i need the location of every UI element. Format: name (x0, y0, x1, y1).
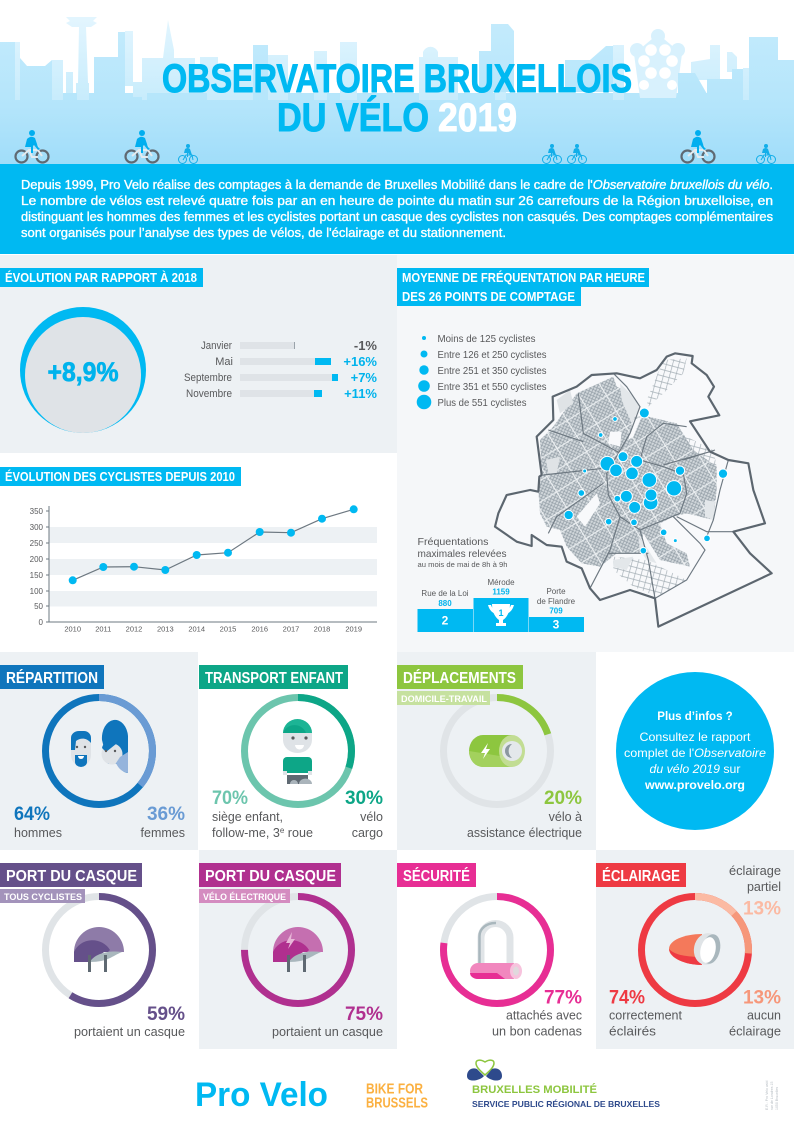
panel: port du casque tous cyclistes (0, 863, 185, 1039)
donut 64/36 (46, 698, 152, 804)
map count points (564, 408, 728, 554)
line chart: 50 (34, 602, 44, 611)
heading (397, 665, 523, 705)
stat: 64% hommes: 64% (14, 804, 50, 825)
stat: 20%: assistance électrique (467, 826, 582, 840)
logo: Bike for Brussels: BIKE FOR (366, 1080, 423, 1098)
icon: trophy: 1 (498, 608, 504, 618)
podium: fréquentations maximales (418, 536, 584, 632)
podium: fréquentations maximales: Mérode (487, 578, 515, 587)
stat: 36% femmes (141, 804, 185, 840)
heading: TRANSPORT ENFANT (205, 670, 343, 687)
stat: 77%: attachés avec (506, 1008, 582, 1022)
line chart: 2019 (345, 624, 362, 634)
stat: 77%: un bon cadenas (492, 1024, 582, 1038)
donut 20% (444, 698, 550, 804)
stat: 70% siège enfant: e (280, 826, 285, 835)
stat: 20%: 20% (544, 788, 582, 809)
stat: 59%: portaient un casque (74, 1025, 185, 1039)
callout: plus d'infos: du vélo 2019 sur (650, 762, 740, 776)
stat: 30% vélo cargo: vélo (360, 810, 383, 824)
icon: trophy (488, 604, 514, 626)
month bars: Novembre (186, 388, 232, 400)
stat: 77% (492, 988, 582, 1038)
icon: cyclist 3 (682, 130, 714, 162)
stat: 13% aucun éclairage (729, 988, 781, 1038)
stat: 74% correctement éclairés: éclairés (609, 1024, 656, 1038)
month bars: Septembre (184, 372, 232, 384)
map legend: Moins de 125 cyclistes (438, 333, 536, 345)
podium: fréquentations maximales: 3 (553, 618, 560, 632)
icon: atomium (630, 29, 685, 98)
month bars: Janvier (201, 340, 232, 352)
stat: éclairage partiel 13%: 13% (743, 898, 781, 920)
callout: plus d'infos (616, 672, 774, 830)
heading (199, 863, 341, 903)
stat: 30% vélo cargo (345, 788, 383, 840)
line chart: 350 (30, 507, 44, 516)
panel: introduction: distinguant les hommes des femmes et les cyclistes portant un casque des cyclistes non casqués. Des comptages complémentaires (21, 210, 773, 224)
line chart: 2012 (126, 624, 142, 634)
line chart: 2015 (220, 624, 236, 634)
month bars (184, 338, 377, 401)
heading: VÉLO ÉLECTRIQUE (203, 892, 286, 903)
big circle +8,9%: +8,9% (48, 357, 118, 387)
stat: 13% aucun éclairage: aucun (747, 1008, 781, 1022)
stat: 70% siège enfant: siège enfant, (212, 810, 283, 824)
heading (397, 268, 649, 306)
logo: Bruxelles Mobilité: SERVICE PUBLIC RÉGIONAL DE BRUXELLES (472, 1099, 660, 1109)
panel: évolution des cyclistes (0, 467, 377, 634)
line chart (30, 505, 377, 634)
heading: DÉPLACEMENTS (403, 668, 516, 687)
stat: 59%: 59% (147, 1004, 185, 1025)
stat: 75% (272, 1004, 383, 1039)
line chart: 200 (30, 555, 44, 564)
icon: man and woman (71, 720, 128, 773)
map legend: Entre 126 et 250 cyclistes (438, 349, 546, 361)
stat: 74% correctement éclairés: 74% (609, 988, 645, 1008)
map legend: Entre 251 et 350 cyclistes (438, 365, 546, 377)
logo: Bike for Brussels: BRUSSELS (366, 1094, 428, 1112)
line chart: 2014 (188, 624, 205, 634)
donut 74/13/13 (642, 896, 748, 1004)
month bars: +16% (343, 354, 377, 369)
podium: fréquentations maximales: 709 (549, 606, 563, 616)
legal notice: 1050 Bruxelles (775, 1087, 779, 1110)
donut 75% (244, 896, 352, 1004)
callout: plus d'infos: Plus d’infos ? (657, 711, 733, 723)
heading: DOMICILE-TRAVAIL (401, 694, 487, 705)
stat: 70% siège enfant: roue (284, 826, 313, 840)
panel: éclairage (596, 850, 794, 1049)
header: city skyline (0, 17, 794, 164)
legal notice (765, 1080, 779, 1110)
stat: 70% siège enfant: follow-me, 3 (212, 826, 279, 840)
stat: 30% vélo cargo: cargo (352, 826, 383, 840)
heading: ÉCLAIRAGE (602, 866, 680, 885)
callout: plus d'infos: complet de l' Observatoire (624, 746, 766, 760)
logo: Bike for Brussels (366, 1080, 428, 1112)
legal notice: rue de Londres 15 (770, 1082, 774, 1110)
stat: 59% (74, 1004, 185, 1039)
stat: 74% correctement éclairés (609, 988, 683, 1038)
stat: 77%: 77% (544, 988, 582, 1008)
line chart: 2010 (64, 624, 81, 634)
heading: PORT DU CASQUE (6, 868, 137, 885)
logo: Pro Velo: Pro Velo (195, 1076, 328, 1114)
icon: electric helmet (273, 927, 323, 972)
podium: fréquentations maximales: maximales relevées (418, 548, 506, 560)
stat: 20%: vélo à (549, 810, 582, 824)
heading: PORT DU CASQUE (205, 868, 336, 885)
line chart: 300 (30, 523, 44, 532)
podium: fréquentations maximales: 880 (438, 599, 452, 608)
stat: 70% siège enfant (212, 788, 313, 840)
stat: 13% aucun éclairage: 13% (743, 988, 781, 1008)
icon: small cyclist 2 (542, 144, 562, 164)
donut 59% (46, 896, 152, 1004)
heading (596, 863, 686, 887)
heading: SÉCURITÉ (403, 866, 470, 885)
title (162, 57, 632, 140)
title: 2019 (438, 96, 517, 140)
panel: introduction (0, 164, 794, 254)
heading: MOYENNE DE FRÉQUENTATION PAR HEURE (402, 270, 645, 285)
stat: 20% (467, 788, 582, 840)
stat: 36% femmes: femmes (141, 826, 185, 840)
heading (397, 863, 476, 887)
heading (0, 665, 104, 689)
stat: 75%: portaient un casque (272, 1025, 383, 1039)
legal notice: E.R.: Pro Velo asbl (765, 1080, 769, 1110)
icon: child (283, 719, 312, 784)
heading: TOUS CYCLISTES (4, 892, 82, 903)
map legend: Plus de 551 cyclistes (438, 397, 526, 409)
donut 77% (444, 896, 550, 1004)
icon: bike light (669, 931, 723, 967)
big circle +8,9% (20, 307, 146, 433)
donut 30/70 (244, 698, 352, 804)
map legend (417, 333, 546, 409)
icon: cyclist 1 (16, 130, 48, 162)
panel: répartition (0, 652, 198, 850)
line chart: 250 (30, 539, 44, 548)
panel: évolution par rapport à 2018 (0, 255, 397, 453)
logo: Bruxelles Mobilité (467, 1060, 660, 1109)
heading: ÉVOLUTION DES CYCLISTES DEPUIS 2010 (5, 469, 235, 484)
podium: fréquentations maximales: Porte (546, 587, 566, 596)
line chart: 100 (30, 587, 44, 596)
panel: moyenne de fréquentation (397, 255, 794, 652)
icon: helmet (74, 927, 124, 972)
stat: 64% hommes: hommes (14, 826, 62, 840)
stat: 74% correctement éclairés: correctement (609, 1008, 683, 1022)
heading: RÉPARTITION (6, 668, 98, 687)
podium: fréquentations maximales: 1159 (492, 588, 510, 596)
heading (199, 665, 348, 689)
icon: U-lock (470, 923, 522, 979)
stat: 13% aucun éclairage: éclairage (729, 1024, 781, 1038)
icon: small cyclist 4 (756, 144, 776, 164)
icon: battery (469, 735, 525, 767)
podium: fréquentations maximales: 2 (442, 614, 449, 628)
map legend: Entre 351 et 550 cyclistes (438, 381, 546, 393)
title: DU VÉLO (277, 95, 429, 140)
stat: 75%: 75% (345, 1004, 383, 1025)
stat: 64% hommes (14, 804, 62, 840)
panel: introduction: Depuis 1999, Pro Velo réalise des comptages à la demande de Bruxelles Mobilité dans le cadre de l' Observatoire bruxellois du vélo . (21, 178, 773, 192)
icon: small cyclist 3 (568, 144, 586, 164)
month bars: -1% (354, 338, 377, 353)
heading (0, 863, 142, 903)
heading: DES 26 POINTS DE COMPTAGE (402, 289, 575, 304)
month bars: +7% (351, 370, 377, 385)
stat: éclairage partiel 13%: partiel (747, 880, 781, 894)
logo: Bruxelles Mobilité: BRUXELLES MOBILITÉ (472, 1083, 597, 1096)
panel: sécurité (397, 863, 582, 1038)
podium: fréquentations maximales: au mois de mai de 8h à 9h (418, 560, 508, 569)
line chart: 2017 (283, 624, 299, 634)
podium: fréquentations maximales: de Flandre (537, 597, 576, 606)
panel: port du casque vélo électrique (199, 850, 397, 1049)
month bars: +11% (344, 386, 377, 401)
heading: ÉVOLUTION PAR RAPPORT À 2018 (5, 270, 197, 285)
stat: 30% vélo cargo: 30% (345, 788, 383, 809)
callout: plus d'infos: Consultez le rapport (640, 730, 751, 744)
stat: éclairage partiel 13%: éclairage (729, 864, 781, 878)
line chart: 2018 (314, 624, 330, 634)
podium: fréquentations maximales: Fréquentations (418, 536, 488, 548)
panel: transport enfant (199, 665, 383, 840)
stat: 36% femmes: 36% (147, 804, 185, 825)
stat: 70% siège enfant: 70% (212, 788, 248, 809)
line chart: 0 (39, 618, 44, 627)
month bars: Mai (215, 356, 233, 368)
icon: cyclist 2 (126, 130, 158, 162)
icon: small cyclist 1 (178, 144, 198, 164)
callout: plus d'infos: www.provelo.org (644, 778, 745, 792)
line chart: 2016 (251, 624, 268, 634)
line chart: 2013 (157, 624, 174, 634)
panel: déplacements (397, 652, 596, 850)
panel: introduction: Le nombre de vélos est relevé quatre fois par an en heure de pointe du matin sur 26 carrefours de la Région bruxelloise, en (21, 194, 773, 208)
line chart: 150 (30, 571, 44, 580)
stat: éclairage partiel 13% (729, 864, 781, 920)
line chart: 2011 (95, 624, 111, 634)
podium: fréquentations maximales: Rue de la Loi (421, 589, 469, 598)
title: OBSERVATOIRE BRUXELLOIS (162, 57, 632, 101)
panel: introduction: sont organisés pour l’analyse des types de vélos, de l'éclairage et du stationnement. (21, 226, 506, 240)
map of Brussels (495, 353, 772, 627)
